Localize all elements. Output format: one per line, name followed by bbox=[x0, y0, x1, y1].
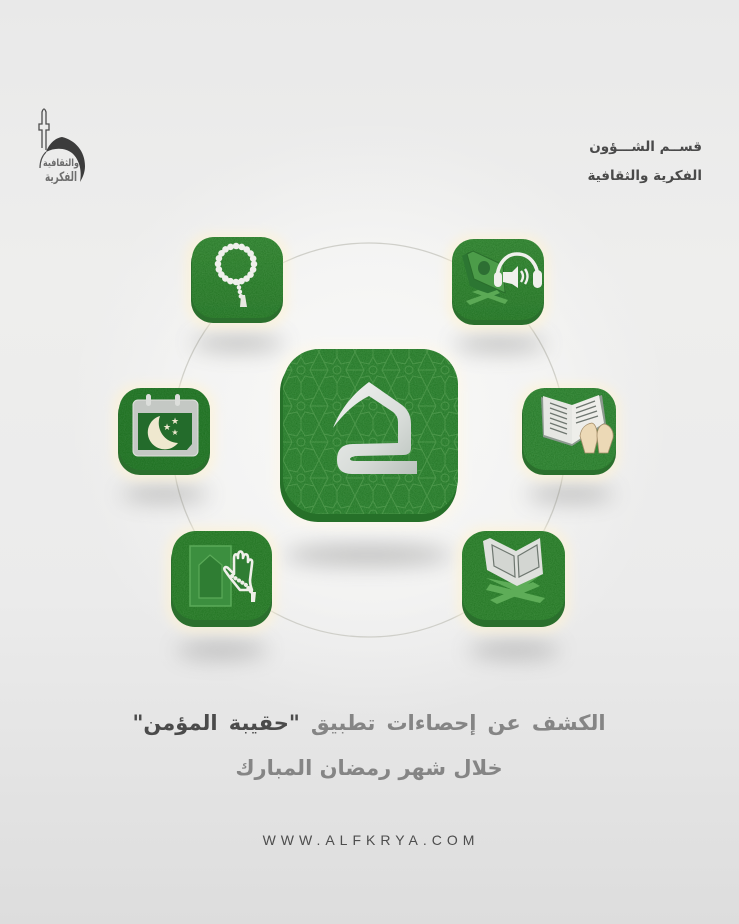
heading: department name bbox=[587, 139, 702, 184]
icon tile: dua book bbox=[522, 388, 616, 475]
heading: department name: قســم الشـــؤون bbox=[589, 139, 702, 155]
icon: calendar with crescent: ★ bbox=[163, 423, 171, 433]
icon: quran with headphones bbox=[462, 251, 542, 305]
central app tile bbox=[280, 349, 458, 522]
icon: prayer beads bbox=[218, 246, 254, 307]
logo: minaret and dome calligraphy bbox=[39, 109, 85, 185]
logo: minaret and dome calligraphy: الفكرية bbox=[45, 170, 77, 185]
tile shadows bbox=[121, 335, 614, 658]
heading: department name: الفكرية والثقافية bbox=[587, 168, 702, 184]
connecting ring bbox=[172, 243, 566, 637]
website url: WWW.ALFKRYA.COM bbox=[263, 832, 479, 848]
logo: minaret and dome calligraphy: والثقافية bbox=[43, 158, 79, 169]
icon tile: prayer beads bbox=[191, 237, 283, 323]
icon tile: quran on stand bbox=[462, 531, 565, 627]
ornament pattern bbox=[283, 349, 458, 514]
tile glows bbox=[112, 232, 621, 633]
title: app statistics headline: الكشف عن إحصاءات تطبيق "حقيبة المؤمن" bbox=[132, 711, 606, 735]
icon tile: ramadan calendar bbox=[118, 388, 210, 475]
icon: calendar with crescent: ★ bbox=[171, 428, 179, 437]
title: app statistics headline bbox=[132, 711, 606, 780]
icon tile: audio quran bbox=[452, 239, 544, 325]
icon: calendar with crescent bbox=[133, 394, 198, 456]
app logo mark bbox=[333, 382, 417, 474]
icon: open book with praying hands bbox=[541, 395, 613, 453]
icon: calendar with crescent: ★ bbox=[171, 417, 179, 427]
title: app statistics headline: خلال شهر رمضان المبارك bbox=[235, 756, 503, 780]
icon tile: prayer rug bbox=[171, 531, 272, 627]
icon: prayer rug and hand with beads bbox=[190, 546, 256, 606]
icon: open quran on rehal bbox=[483, 538, 545, 604]
